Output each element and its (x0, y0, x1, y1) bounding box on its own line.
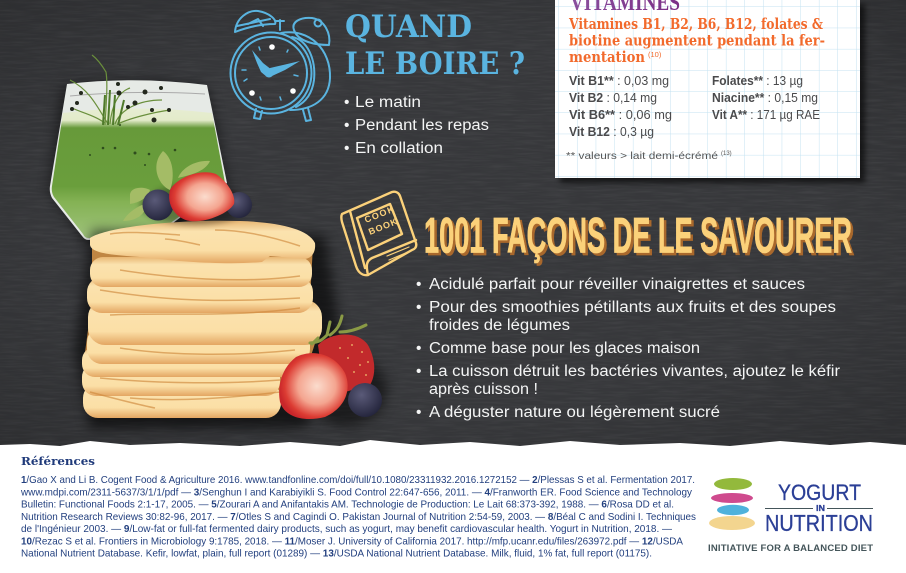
list: when to drink: • (344, 117, 349, 134)
list: when to drink: En collation (355, 140, 443, 157)
orange vitamins statement: mentation (569, 48, 645, 66)
halved strawberry (169, 172, 234, 221)
list: ways to enjoy: • (416, 363, 421, 380)
list: ways to enjoy: La cuisson détruit les bactéries vivantes, ajoutez le kéfir (429, 363, 840, 380)
blueberry (226, 192, 252, 218)
references heading: Références (21, 454, 95, 468)
cookbook label: BOOK (367, 216, 399, 237)
list: ways to enjoy: Acidulé parfait pour réveiller vinaigrettes et sauces (429, 276, 805, 293)
logo wordmark: YOGURT (778, 480, 861, 505)
title: quand le boire (345, 9, 525, 82)
orange vitamins statement: (10) (648, 50, 662, 59)
image: pancake stack (75, 221, 342, 428)
logo stones (709, 478, 755, 530)
list: ways to enjoy: • (416, 299, 421, 316)
list: when to drink: • (344, 94, 349, 111)
list: ways to enjoy: après cuisson ! (429, 381, 538, 398)
list: ways to enjoy: A déguster nature ou légèrement sucré (429, 404, 720, 421)
image: green smoothie glass (48, 55, 230, 244)
logo wordmark (765, 480, 873, 536)
blueberry (142, 190, 174, 220)
references text: 10/Rezac S et al. Frontiers in Microbiology 9:1785, 2018. — 11/Moser J. University of California 2017. http://mfp.ucanr.edu/files/263972.pdf — 12/USDA (21, 536, 683, 548)
references text: 1/Gao X and Li B. Cogent Food & Agriculture 2016. www.tandfonline.com/doi/full/10.1080/23311932.2016.1272152 — 2/Plessas S et al. Fermentation 2017. (21, 475, 695, 486)
list: when to drink: Pendant les repas (355, 117, 489, 134)
image: top berries and leaves (123, 151, 252, 225)
references text: www.mdpi.com/2311-5637/3/1/1/pdf — 3/Senghun I and Karabiyikli S. Food Control 22:647-656, 2011. — 4/Franworth ER. Food Science and Technology (20, 488, 693, 498)
vitamin values column 1: Vit B12 : 0,3 µg (569, 125, 654, 139)
references text: National Nutrient Database. Kefir, lowfat, plain, full report (01289) — 13/USDA National Nutrient Database. Milk, fluid, 1% fat, full report (01175). (21, 548, 652, 560)
logo wordmark: NUTRITION (765, 510, 873, 536)
pancake browning streaks (90, 230, 300, 408)
references text (20, 475, 696, 560)
clock dots (249, 44, 296, 96)
orange vitamins statement: biotine augmentent pendant la fer- (569, 32, 825, 50)
footnote: (13) (721, 151, 732, 157)
footnote: ** valeurs > lait demi-écrémé (566, 150, 718, 162)
list: when to drink: • (344, 140, 349, 157)
image: bottom berries (279, 316, 387, 426)
strawberry half (279, 353, 348, 419)
references text: de l'Ingénieur 2003. — 9/Low-fat or full-fat fermented dairy products, such as yogurt, may benefit cardiovascular health. Yogurt in Nutrition, 2018. — (21, 524, 673, 535)
pancake base silhouette (84, 240, 320, 417)
list: ways to enjoy: Comme base pour les glaces maison (429, 340, 700, 357)
strawberry (318, 334, 374, 392)
orange vitamins statement (568, 15, 825, 66)
title: quand le boire: LE BOIRE ? (345, 46, 525, 82)
cookbook label: COOK (363, 204, 397, 225)
vitamin values column 2: Vit A** : 171 µg RAE (712, 108, 820, 122)
herb garnish (70, 55, 171, 125)
references text: Bulletin: Functional Foods 2:1-17, 2005. — 5/Zourari A and Anifantakis AM. Technologie de Production: Le Lait 68:373-392, 1988. — 6/Rosa DD et al. (21, 500, 674, 510)
leaves (123, 151, 210, 221)
vitamin values column 2: Niacine** : 0,15 mg (712, 91, 818, 105)
icon: cookbook (341, 192, 416, 275)
logo tagline: INITIATIVE FOR A BALANCED DIET (708, 543, 873, 554)
vitamin values column 2: Folates** : 13 µg (712, 74, 803, 88)
list: ways to enjoy: Pour des smoothies pétillants aux fruits et des soupes (429, 299, 836, 316)
pancake layers (82, 221, 322, 418)
vitamin values column 1 (569, 74, 672, 139)
clock hands (252, 50, 300, 78)
blueberry (348, 383, 382, 417)
list: ways to enjoy: • (416, 276, 421, 293)
icon: alarm clock (230, 11, 330, 121)
vitamin values column 1: Vit B1** : 0,03 mg (569, 74, 669, 88)
smoothie speckles (89, 124, 176, 166)
list: ways to enjoy: froides de légumes (429, 317, 570, 334)
list: when to drink (344, 94, 489, 157)
references text: Nutrition Research Reviews 30:82-96, 2017. — 7/Otles S and Cagindi O. Pakistan Journal of Nutrition 2:54-59, 2003. — 8/Béal C and Sodini I. Techniques (21, 512, 696, 523)
chalkboard background (0, 0, 906, 450)
panel: vitamins note paper (555, 0, 865, 183)
panel: references footer (0, 440, 906, 573)
vitamin values column 2 (712, 74, 820, 122)
logo: yogurt in nutrition (708, 478, 873, 554)
vitamin values column 1: Vit B2 : 0,14 mg (569, 91, 657, 105)
strawberry seeds (339, 344, 369, 376)
list: when to drink: Le matin (355, 94, 421, 111)
logo wordmark: IN (816, 504, 825, 513)
title: quand le boire: QUAND (345, 9, 472, 45)
list: ways to enjoy: • (416, 340, 421, 357)
vitamin values column 1: Vit B6** : 0,06 mg (569, 108, 672, 122)
list: ways to enjoy (416, 276, 840, 421)
cookbook label (363, 204, 399, 237)
orange vitamins statement: Vitamines B1, B2, B6, B12, folates & (568, 15, 823, 33)
list: ways to enjoy: • (416, 404, 421, 421)
